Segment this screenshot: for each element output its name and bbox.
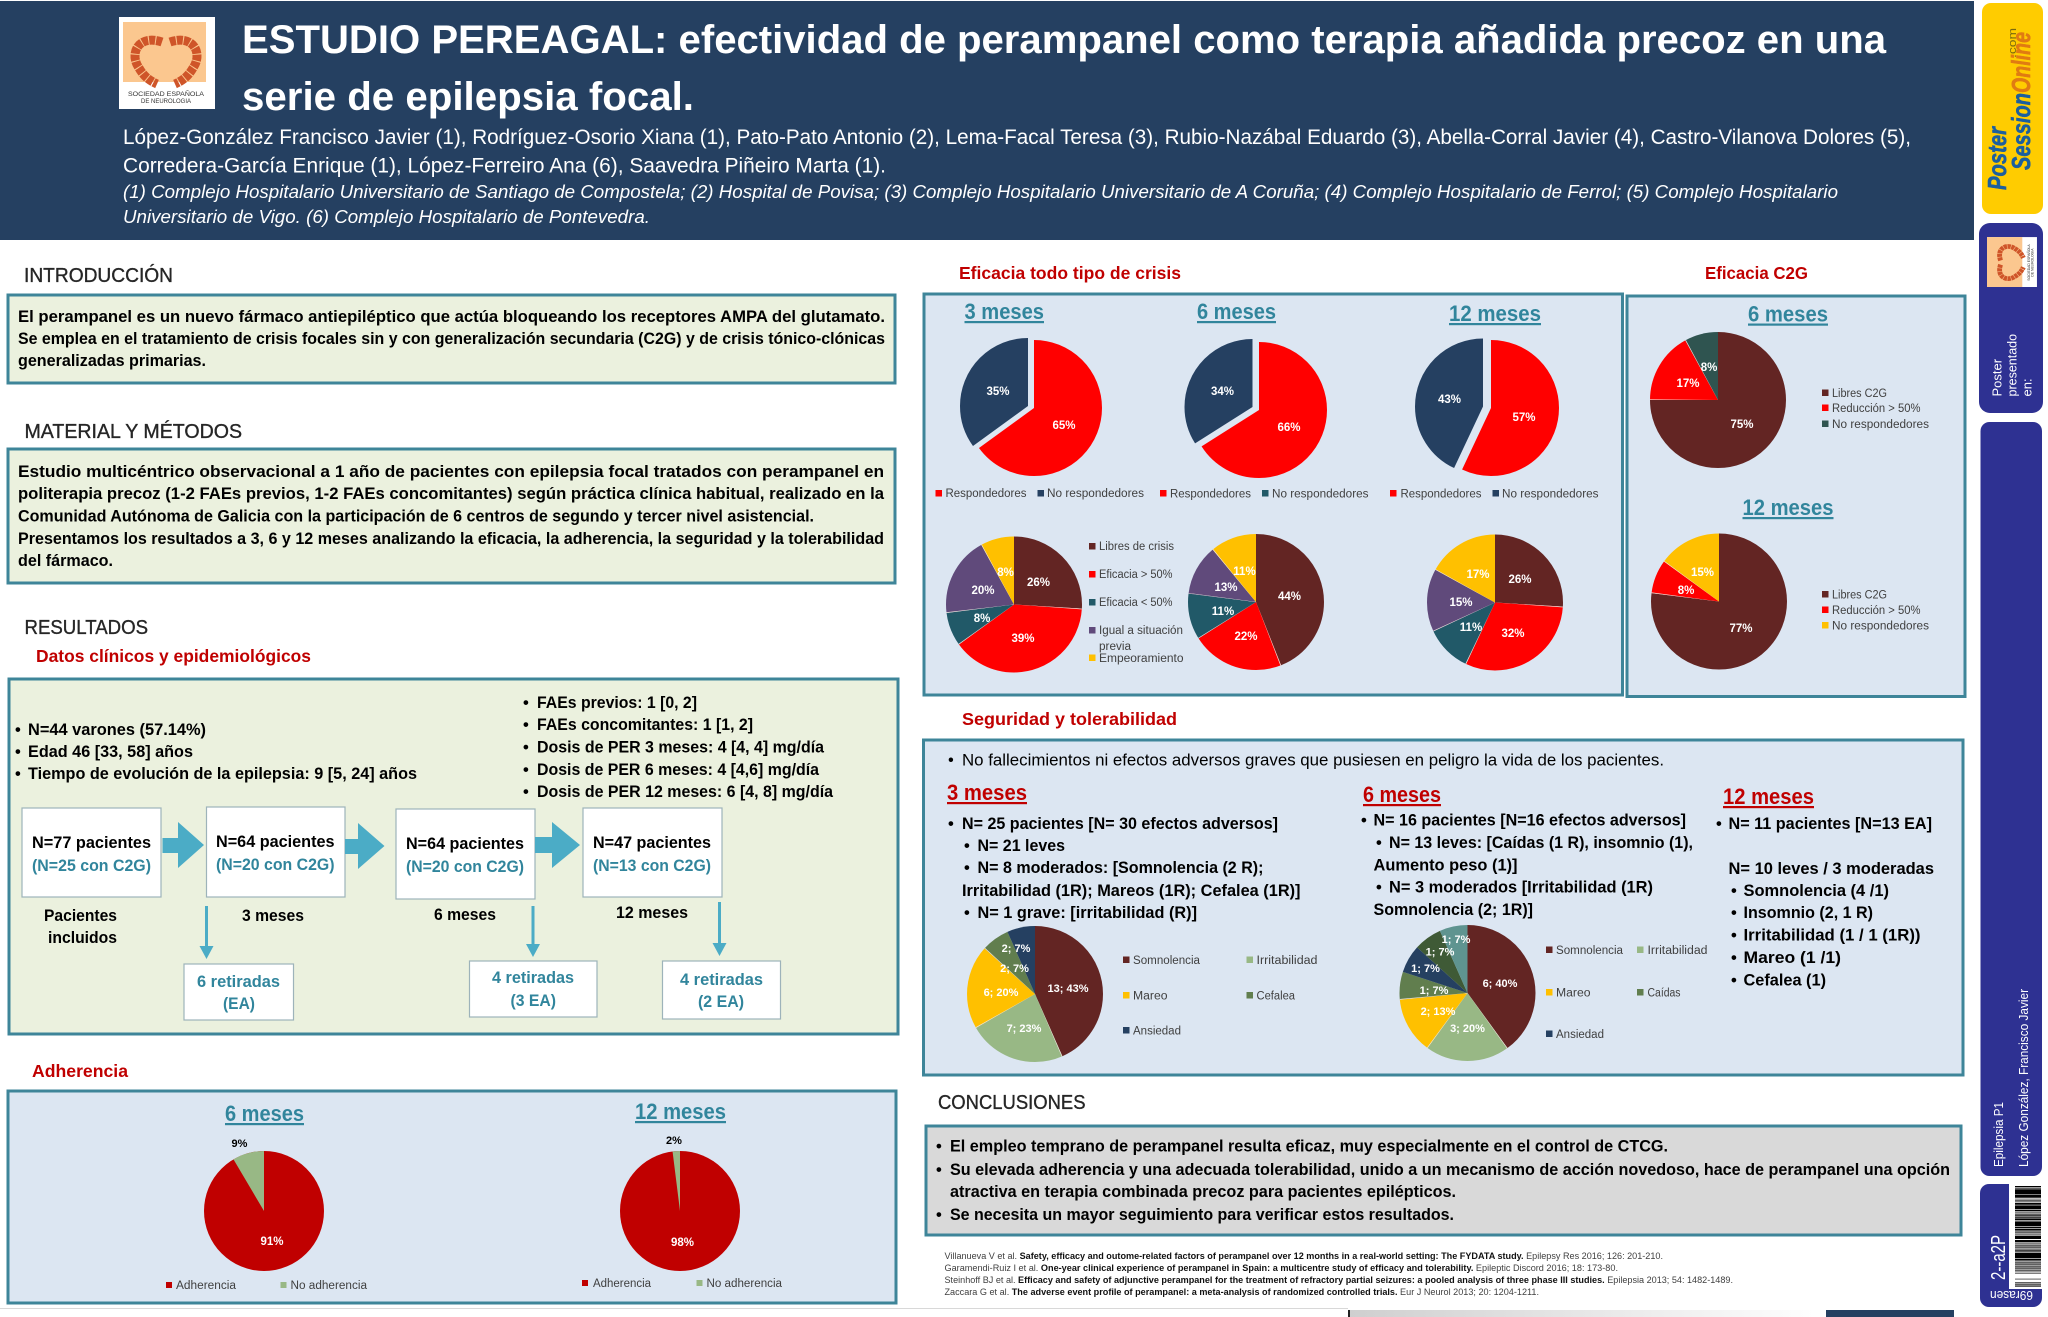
legend: adherencia 12 meses: No adherencia [706,1278,783,1290]
legend: respondedores 12 meses: No respondedores [1502,488,1599,500]
pie chart: C2G 12 meses: 77% [1729,623,1753,635]
pie chart: efectos adversos 3 meses: 2; 7% [1000,963,1029,975]
text block: seguridad 6 meses [1361,812,1693,919]
text block: seguridad 6 meses: • [1376,834,1382,852]
panel: material y métodos: Comunidad Autónoma de Galicia con la participación de 6 centros de segundo y tercer nivel asistencial. [18,508,814,526]
panel: seguridad y tolerabilidad [924,740,1963,1075]
title: ESTUDIO PEREAGAL: efectividad de perampanel como terapia añadida precoz en una [242,18,1887,62]
panel: introducción: Se emplea en el tratamiento de crisis focales sin y con generalización secundaria (C2G) y de crisis tónico-clónicas [18,330,885,348]
text block: FAEs y dosis: • [523,694,529,712]
affiliations [123,182,1838,227]
legend: adherencia 6 meses: Adherencia [176,1280,237,1292]
legend: eficacia: Eficacia < 50% [1099,597,1172,609]
pie chart: eficacia 6 meses: 11% [1233,566,1256,578]
legend: C2G 6 meses [1822,388,1929,431]
pie chart: efectos adversos 6 meses: 6; 40% [1483,978,1518,990]
pie chart: eficacia 6 meses: 11% [1212,606,1234,618]
chart heading: 6 meses: 6 meses [225,1101,304,1126]
legend: eficacia: Empeoramiento [1099,653,1184,665]
pie chart: C2G 6 meses [1676,362,1754,434]
subheading: datos clínicos: Datos clínicos y epidemiológicos [36,646,311,666]
legend: respondedores 12 meses [1390,488,1599,500]
text block: FAEs y dosis [523,694,834,801]
pie chart: efectos adversos 3 meses: 6; 20% [984,987,1019,999]
sidebar: PosterSessionOnline logo: .com [2007,28,2019,58]
references: Steinhoff BJ et al. Efficacy and safety of adjunctive perampanel for the treatment of refractory partial seizures: a pooled analysis of three phase III studies. Epilepsia 2013; 54: 1482-1489. [944,1275,1733,1285]
panel: datos clínicos y flujo de pacientes [9,679,898,1034]
legend: efectos adversos 6 meses [1546,945,1708,1041]
text block: FAEs y dosis: FAEs concomitantes: 1 [1, 2] [537,716,753,734]
pie chart: respondedores 6 meses: 66% [1277,422,1301,434]
text block: seguridad 12 meses: N= 10 leves / 3 moderadas [1728,860,1934,878]
text block: seguridad 3 meses: N= 21 leves [978,837,1065,855]
text block: demografía: • [15,721,21,739]
text block: seguridad 3 meses: Irritabilidad (1R); Mareos (1R); Cefalea (1R)] [962,882,1300,900]
pie chart: C2G 6 meses: 8% [1701,362,1717,374]
text block: seguridad 3 meses: • [964,859,970,877]
legend: efectos adversos 3 meses: Cefalea [1256,990,1296,1002]
legend: eficacia [1089,541,1184,665]
flow box: 3 meses: (N=20 con C2G) [216,856,334,874]
legend: respondedores 3 meses: No respondedores [1047,488,1144,500]
panel: introducción: El perampanel es un nuevo fármaco antiepiléptico que actúa bloqueando los receptores AMPA del glutamato. [18,308,885,326]
text block: demografía: • [15,765,21,783]
text block: demografía [15,721,417,783]
panel: eficacia todo tipo de crisis [924,294,1622,695]
panel: eficacia C2G [1627,296,1965,696]
down arrow [526,906,540,957]
text block: FAEs y dosis: Dosis de PER 3 meses: 4 [4, 4] mg/día [537,738,825,756]
label: 12 meses: 12 meses [616,904,688,922]
down arrow [200,906,214,959]
text block: seguridad 12 meses: N= 11 pacientes [N=13 EA] [1728,815,1932,833]
pie chart: efectos adversos 3 meses: 7; 23% [1007,1023,1042,1035]
text block: seguridad 12 meses: • [1731,882,1737,900]
pie chart: eficacia 12 meses: 11% [1460,622,1482,634]
legend: C2G 12 meses [1822,590,1929,632]
legend: adherencia 6 meses [166,1280,368,1292]
text block: demografía: N=44 varones (57.14%) [28,721,206,739]
flow box: 6 meses [396,809,535,899]
flow box: pacientes incluidos: N=77 pacientes [32,834,151,852]
subheading: 3 meses: 3 meses [947,780,1027,805]
logo: SEN rotated [1987,237,2037,287]
pie chart: efectos adversos 6 meses: 2; 13% [1421,1006,1456,1018]
chart heading: 6 meses: 6 meses [1748,302,1828,326]
panel: conclusiones: Se necesita un mayor seguimiento para verificar estos resultados. [950,1206,1454,1224]
pie chart: efectos adversos 6 meses: 1; 7% [1411,963,1440,975]
text block: FAEs y dosis: • [523,783,529,801]
chart heading: 3 meses: 3 meses [964,299,1044,324]
legend: C2G 12 meses: No respondedores [1832,620,1929,632]
flow box: 3 meses: N=64 pacientes [216,833,334,851]
text block: seguridad 12 meses: • [1731,949,1737,967]
heading: eficacia todo tipo de crisis: Eficacia todo tipo de crisis [959,263,1181,283]
box: 6 retiradas [184,964,294,1020]
text block: seguridad 12 meses: Somnolencia (4 /1) [1744,882,1889,900]
pie chart: eficacia 12 meses: 15% [1449,597,1473,609]
box: 6 retiradas: (EA) [223,995,255,1013]
legend: respondedores 6 meses [1160,488,1369,500]
text block: seguridad 3 meses: • [964,904,970,922]
pie chart: efectos adversos 6 meses [1411,934,1518,1035]
flow box: 12 meses [583,808,722,897]
text block: seguridad 3 meses: N= 8 moderados: [Somnolencia (2 R); [978,859,1264,877]
text block: seguridad 12 meses: Insomnio (2, 1 R) [1744,904,1873,922]
panel: material y métodos: del fármaco. [18,552,113,570]
flow box: 6 meses: (N=20 con C2G) [406,858,524,876]
pie chart: respondedores 6 meses [1211,373,1301,444]
panel: adherencia [8,1091,896,1303]
pie chart: C2G 12 meses: 15% [1691,567,1714,579]
legend: efectos adversos 3 meses: Irritabilidad [1256,955,1318,967]
legend: C2G 12 meses: Reducción > 50% [1832,605,1920,617]
panel: introducción: generalizadas primarias. [18,352,206,370]
pie chart: eficacia 6 meses: 13% [1214,582,1238,594]
text block: seguridad 12 meses: Irritabilidad (1 / 1 (1R)) [1744,926,1920,944]
down arrow [712,902,726,956]
pie chart: respondedores 12 meses: 57% [1512,412,1536,424]
pie chart: eficacia 3 meses: 8% [997,567,1014,579]
references: Zaccara G et al. The adverse event profile of perampanel: a meta-analysis of randomized controlled trials. Eur J Neurol 2013; 20: 1204-1211. [944,1287,1539,1297]
text block: seguridad 12 meses: • [1731,972,1737,990]
chart heading: 12 meses: 12 meses [635,1099,726,1124]
text: no fallecimientos: • [948,752,954,770]
flow box: pacientes incluidos: (N=25 con C2G) [32,857,151,875]
legend: C2G 6 meses: Reducción > 50% [1832,403,1920,415]
text block: FAEs y dosis: FAEs previos: 1 [0, 2] [537,694,697,712]
pie chart: adherencia 12 meses: 98% [671,1237,694,1249]
box: 4 retiradas 2 EA [662,961,780,1019]
affiliations: Universitario de Vigo. (6) Complejo Hospitalario de Pontevedra. [123,207,650,227]
legend: respondedores 6 meses: No respondedores [1272,488,1369,500]
text block: seguridad 3 meses [948,815,1300,922]
panel: material y métodos: Presentamos los resultados a 3, 6 y 12 meses analizando la eficacia, la adherencia, la seguridad y la tolerabilidad [18,530,884,548]
label: pacientes incluidos: incluidos [48,929,117,947]
heading: conclusiones: CONCLUSIONES [938,1092,1086,1114]
legend: respondedores 6 meses: Respondedores [1170,488,1251,500]
pie chart: C2G 6 meses: 75% [1730,419,1754,431]
chart heading: 6 meses: 6 meses [1197,299,1276,324]
legend: eficacia: Libres de crisis [1099,541,1174,553]
legend: efectos adversos 6 meses: Somnolencia [1556,945,1624,957]
heading: eficacia C2G: Eficacia C2G [1705,263,1808,283]
text block: seguridad 12 meses [1716,815,1934,990]
text block: seguridad 12 meses: Mareo (1 /1) [1744,949,1841,967]
references: Garamendi-Ruiz I et al. One-year clinical experience of perampanel in Spain: a multicentre study of efficacy and tolerability. Epileptic Discord 2016; 18: 173-80. [944,1263,1618,1273]
label: pacientes incluidos: Pacientes [44,907,117,925]
pie chart: efectos adversos 3 meses: 2; 7% [1002,943,1031,955]
pie chart: adherencia 6 meses [204,1138,324,1271]
heading: introducción: INTRODUCCIÓN [24,264,173,287]
box: 4 retiradas 3 EA [470,961,597,1017]
pie chart: C2G 12 meses: 8% [1678,585,1694,597]
text block: seguridad 6 meses: • [1376,878,1382,896]
sidebar: PosterSessionOnline logo: Poster [1982,126,2012,190]
sidebar: poster presentado en [1979,223,2043,413]
text block: FAEs y dosis: • [523,738,529,756]
text block: seguridad 3 meses: N= 1 grave: [irritabilidad (R)] [978,904,1197,922]
legend: efectos adversos 3 meses [1123,955,1318,1038]
sidebar: sesión y autor [1980,422,2042,1176]
legend: adherencia 12 meses [582,1278,783,1290]
legend: respondedores 3 meses [936,488,1144,500]
text block: demografía: • [15,743,21,761]
pie chart: efectos adversos 3 meses [984,943,1089,1035]
text block: seguridad 6 meses: N= 16 pacientes [N=16 efectos adversos] [1374,812,1686,830]
pie chart: eficacia 6 meses [1212,566,1301,643]
panel: conclusiones: • [936,1161,942,1179]
panel: introducción [8,295,895,383]
label: 3 meses: 3 meses [242,907,304,925]
panel: conclusiones: • [936,1206,942,1224]
legend: efectos adversos 3 meses: Somnolencia [1133,955,1201,967]
sidebar: PosterSessionOnline logo: Session [2006,93,2036,170]
heading: seguridad y tolerabilidad: Seguridad y tolerabilidad [962,709,1177,729]
legend: efectos adversos 3 meses: Mareo [1133,990,1168,1002]
logo: Sociedad Española de Neurología [119,17,215,109]
authors: López-González Francisco Javier (1), Rodríguez-Osorio Xiana (1), Pato-Pato Antonio (2), Lema-Facal Teresa (3), Rubio-Nazábal Eduardo (3), Abella-Corral Javier (4), Castro-Vilanova Dolores (5), [123,126,1911,149]
legend: efectos adversos 3 meses: Ansiedad [1133,1026,1181,1038]
legend: C2G 6 meses: No respondedores [1832,419,1929,431]
box: 4 retiradas 2 EA: 4 retiradas [680,971,763,989]
heading: resultados: RESULTADOS [24,617,148,639]
pie chart: efectos adversos 6 meses: 1; 7% [1420,985,1449,997]
legend: adherencia 12 meses: Adherencia [593,1278,652,1290]
header banner [0,1,1974,240]
legend: efectos adversos 6 meses: Mareo [1556,988,1590,1000]
sidebar: PosterSessionOnline logo [1982,3,2043,214]
sidebar: PosterSessionOnline logo: Online [2006,32,2036,93]
box: 4 retiradas 3 EA: (3 EA) [510,992,556,1010]
panel: conclusiones: Su elevada adherencia y una adecuada tolerabilidad, unido a un mecanismo de acción novedoso, hace de perampanel una opción [950,1161,1950,1179]
legend: eficacia: previa [1099,641,1132,653]
text block: seguridad 12 meses: Cefalea (1) [1744,972,1826,990]
pie chart: eficacia 3 meses: 39% [1011,633,1035,645]
panel: material y métodos: politerapia precoz (1-2 FAEs previos, 1-2 FAEs concomitantes) según práctica clínica habitual, realizado en la [18,485,885,503]
authors [123,126,1911,178]
pie chart: respondedores 12 meses [1438,372,1536,442]
legend: eficacia: Eficacia > 50% [1099,569,1172,581]
logo: SEN rotated: DE NEUROLOGIA [2031,248,2035,277]
text block: seguridad 3 meses: • [964,837,970,855]
text block: demografía: Tiempo de evolución de la epilepsia: 9 [5, 24] años [28,765,417,783]
flow box: pacientes incluidos [22,808,161,897]
pie chart: adherencia 12 meses [620,1135,740,1271]
affiliations: (1) Complejo Hospitalario Universitario de Santiago de Compostela; (2) Hospital de Povisa; (3) Complejo Hospitalario Universitario de A Coruña; (4) Complejo Hospitalario de Ferrol; (5) Complejo Hospitalario [123,182,1838,202]
box: 4 retiradas 3 EA: 4 retiradas [492,969,574,987]
text block: FAEs y dosis: • [523,716,529,734]
pie chart: eficacia 12 meses: 17% [1466,569,1490,581]
flow box: 3 meses [206,807,345,897]
pie chart: C2G 12 meses [1678,567,1753,636]
legend: adherencia 6 meses: No adherencia [290,1280,368,1292]
panel: material y métodos [8,449,895,583]
logo: Sociedad Española de Neurología: SOCIEDAD ESPAÑOLA [128,91,204,98]
logo: Sociedad Española de Neurología: DE NEUROLOGIA [141,99,191,105]
pie chart: eficacia 12 meses [1449,568,1532,640]
text block: seguridad 6 meses: N= 3 moderados [Irritabilidad (1R) [1389,878,1653,896]
text block: seguridad 12 meses: • [1731,904,1737,922]
pie chart: efectos adversos 6 meses: 1; 7% [1426,946,1455,958]
barcode [2015,1186,2041,1287]
title: serie de epilepsia focal. [242,75,694,119]
references [944,1251,1733,1297]
subheading: 6 meses: 6 meses [1363,782,1441,807]
pie chart: eficacia 6 meses: 22% [1234,631,1258,643]
pie chart: respondedores 12 meses: 43% [1438,394,1461,406]
text block: demografía: Edad 46 [33, 58] años [28,743,193,761]
pie chart: eficacia 6 meses: 44% [1278,591,1301,603]
pie chart: eficacia 12 meses: 32% [1501,628,1525,640]
authors: Corredera-García Enrique (1), López-Ferreiro Ana (6), Saavedra Piñeiro Marta (1). [123,154,886,178]
text block: seguridad 6 meses: N= 13 leves: [Caídas (1 R), insomnio (1), [1389,834,1693,852]
sidebar: código de póster y código de barras: 69rasen [1990,1288,2033,1303]
panel: conclusiones: El empleo temprano de perampanel resulta eficaz, muy especialmente en el control de CTCG. [950,1138,1668,1156]
arrow [535,822,580,868]
arrow [345,823,384,869]
heading: material y métodos: MATERIAL Y MÉTODOS [24,420,242,443]
logo: SEN rotated: SOCIEDAD ESPAÑOLA [2026,244,2031,281]
bottom edge strip [0,1308,1954,1317]
text block: seguridad 3 meses: N= 25 pacientes [N= 30 efectos adversos] [962,815,1278,833]
box: 6 retiradas: 6 retiradas [197,973,280,991]
flow box: 6 meses: N=64 pacientes [406,835,524,853]
sidebar: poster presentado en: Poster [1990,358,2004,396]
label: pacientes incluidos [44,907,117,947]
pie chart: respondedores 6 meses: 34% [1211,386,1234,398]
pie chart: adherencia 6 meses: 9% [232,1138,248,1150]
legend: C2G 6 meses: Libres C2G [1832,388,1887,400]
text block: seguridad 12 meses: • [1731,926,1737,944]
flow box: 12 meses: (N=13 con C2G) [593,857,711,875]
text block: FAEs y dosis: • [523,761,529,779]
text block: seguridad 6 meses: Aumento peso (1)] [1374,856,1518,874]
pie chart: respondedores 3 meses: 35% [986,386,1010,398]
pie chart: adherencia 6 meses: 91% [260,1236,284,1248]
sidebar: sesión y autor: Epilepsia P1 [1991,1102,2006,1167]
legend: efectos adversos 6 meses: Ansiedad [1556,1029,1604,1041]
text block: seguridad 6 meses: Somnolencia (2; 1R)] [1374,901,1533,919]
legend: eficacia: Igual a situación [1099,625,1183,637]
sidebar: poster presentado en: en: [2020,378,2034,396]
pie chart: efectos adversos 6 meses: 1; 7% [1442,934,1471,946]
pie chart: eficacia 3 meses: 20% [971,585,995,597]
legend: respondedores 3 meses: Respondedores [946,488,1027,500]
pie chart: eficacia 3 meses: 26% [1027,577,1050,589]
panel: conclusiones [926,1126,1961,1235]
label: 6 meses: 6 meses [434,906,496,924]
sidebar: código de póster y código de barras [1980,1184,2042,1307]
sidebar: código de póster y código de barras: 2--a2P [1988,1235,2010,1280]
pie chart: respondedores 3 meses: 65% [1052,420,1076,432]
legend: efectos adversos 6 meses: Caídas [1648,988,1681,1000]
subheading: 12 meses: 12 meses [1723,784,1814,809]
heading: adherencia: Adherencia [32,1061,128,1081]
box: 4 retiradas 2 EA: (2 EA) [698,993,744,1011]
sidebar: sesión y autor: López González, Francisco Javier [2016,988,2031,1167]
legend: efectos adversos 6 meses: Irritabilidad [1648,945,1708,957]
legend: C2G 12 meses: Libres C2G [1832,590,1887,602]
panel: conclusiones: • [936,1138,942,1156]
title [242,18,1887,119]
text block: seguridad 3 meses: • [948,815,954,833]
flow box: 12 meses: N=47 pacientes [593,834,711,852]
text block: seguridad 12 meses: • [1716,815,1722,833]
pie chart: respondedores 3 meses [986,372,1076,442]
text block: FAEs y dosis: Dosis de PER 6 meses: 4 [4,6] mg/día [537,761,820,779]
panel: material y métodos: Estudio multicéntrico observacional a 1 año de pacientes con epilepsia focal tratados con perampanel en [18,463,884,481]
pie chart: efectos adversos 6 meses: 3; 20% [1450,1023,1485,1035]
arrow [162,822,204,868]
text block: seguridad 6 meses: • [1361,812,1367,830]
pie chart: C2G 6 meses: 17% [1676,378,1700,390]
sidebar: poster presentado en: presentado [2006,334,2020,396]
legend: respondedores 12 meses: Respondedores [1400,488,1482,500]
chart heading: 12 meses: 12 meses [1449,301,1541,326]
pie chart: eficacia 12 meses: 26% [1508,574,1532,586]
text: no fallecimientos: No fallecimientos ni efectos adversos graves que pusiesen en peligro la vida de los pacientes. [962,752,1664,770]
panel: conclusiones: atractiva en terapia combinada precoz para pacientes epilépticos. [950,1183,1456,1201]
pie chart: efectos adversos 3 meses: 13; 43% [1048,983,1089,995]
pie chart: eficacia 3 meses: 8% [974,613,990,625]
chart heading: 12 meses: 12 meses [1742,495,1834,520]
references: Villanueva V et al. Safety, efficacy and outome-related factors of perampanel over 12 months in a real-world setting: The FYDATA study. Epilepsy Res 2016; 126: 201-210. [944,1251,1663,1261]
pie chart: adherencia 12 meses: 2% [666,1135,682,1147]
text block: FAEs y dosis: Dosis de PER 12 meses: 6 [4, 8] mg/día [537,783,834,801]
pie chart: eficacia 3 meses [971,567,1050,645]
